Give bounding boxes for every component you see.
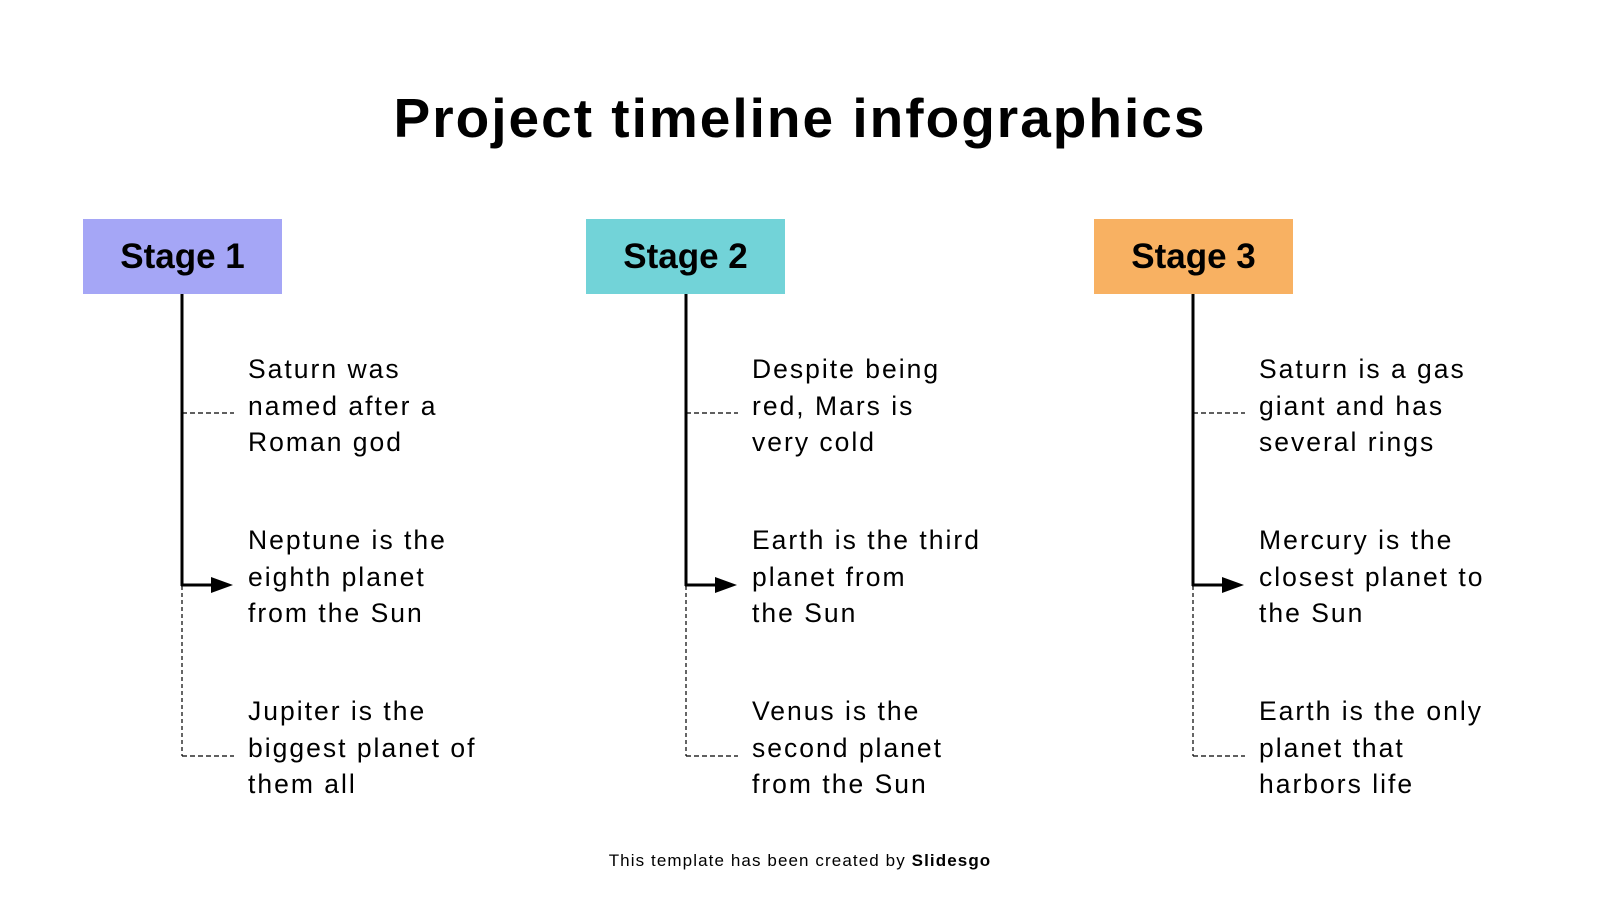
text: stage 2 item 2: the Sun (752, 598, 857, 628)
text: stage 1 item 1: named after a (248, 391, 438, 421)
text: stage 2 item 3 (752, 696, 943, 799)
text: stage 1 item 3: them all (248, 769, 357, 799)
text: stage 2 item 1 (752, 354, 940, 457)
text: stage 1 item 2: Neptune is the (248, 525, 447, 555)
text: stage 2 item 1: very cold (752, 427, 876, 457)
connector: stage 2 (685, 294, 738, 756)
stage 1 box: Stage 1 (120, 237, 245, 276)
text: stage 1 item 1: Roman god (248, 427, 403, 457)
text: stage 2 item 1: red, Mars is (752, 391, 914, 421)
text: stage 2 item 2: planet from (752, 562, 907, 592)
stage 3 box (1094, 219, 1293, 294)
text: stage 3 item 3: harbors life (1259, 769, 1414, 799)
text: stage 3 item 1 (1259, 354, 1466, 457)
connector: stage 3 (1192, 294, 1245, 756)
text: stage 3 item 1: Saturn is a gas (1259, 354, 1466, 384)
title: Project timeline infographics (394, 87, 1206, 149)
text: stage 1 item 2: from the Sun (248, 598, 424, 628)
text: stage 3 item 3: planet that (1259, 733, 1405, 763)
footer credit: This template has been created by Slidesgo (609, 851, 991, 870)
text: stage 1 item 3: Jupiter is the (248, 696, 426, 726)
stage 2 box (586, 219, 785, 294)
text: stage 3 item 2: the Sun (1259, 598, 1364, 628)
stage 2 box: Stage 2 (623, 237, 748, 276)
text: stage 1 item 3: biggest planet of (248, 733, 476, 763)
text: stage 3 item 1: several rings (1259, 427, 1435, 457)
text: stage 3 item 3: Earth is the only (1259, 696, 1483, 726)
text: stage 2 item 1: Despite being (752, 354, 940, 384)
text: stage 2 item 3: second planet (752, 733, 943, 763)
connector: stage 1 (181, 294, 234, 756)
text: stage 1 item 1: Saturn was (248, 354, 401, 384)
text: stage 3 item 1: giant and has (1259, 391, 1444, 421)
text: stage 1 item 2 (248, 525, 447, 628)
text: stage 3 item 2 (1259, 525, 1485, 628)
text: stage 2 item 3: Venus is the (752, 696, 920, 726)
text: stage 2 item 2 (752, 525, 981, 628)
text: stage 3 item 2: Mercury is the (1259, 525, 1453, 555)
text: stage 2 item 2: Earth is the third (752, 525, 981, 555)
stage 1 box (83, 219, 282, 294)
stage 3 box: Stage 3 (1131, 237, 1256, 276)
text: stage 1 item 1 (248, 354, 438, 457)
text: stage 2 item 3: from the Sun (752, 769, 928, 799)
text: stage 1 item 3 (248, 696, 476, 799)
text: stage 3 item 3 (1259, 696, 1483, 799)
text: stage 1 item 2: eighth planet (248, 562, 426, 592)
text: stage 3 item 2: closest planet to (1259, 562, 1485, 592)
